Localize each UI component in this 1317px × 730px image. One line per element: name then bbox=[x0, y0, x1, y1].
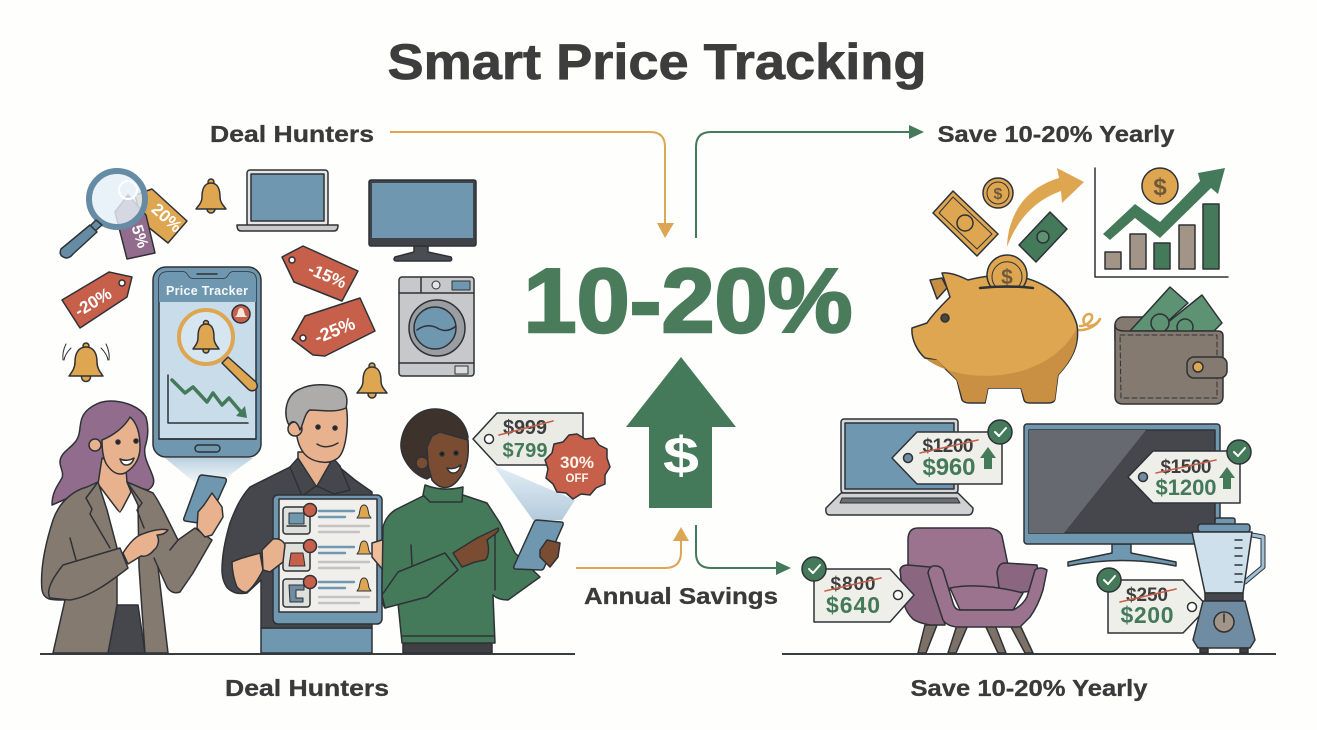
icon: blender bbox=[1192, 518, 1263, 653]
tag: minus 25 percent bbox=[292, 298, 375, 356]
woman face bbox=[102, 417, 140, 474]
chart: rising savings bbox=[1095, 168, 1228, 277]
icon: magnifier with price tags bbox=[60, 171, 187, 259]
woman hair bbox=[52, 401, 154, 505]
tag: minus 15 percent bbox=[282, 246, 358, 301]
holding hand bbox=[540, 540, 560, 567]
badge: 30 percent off: OFF bbox=[566, 473, 588, 485]
tag: blender price: $250 bbox=[1126, 585, 1168, 606]
man head bbox=[296, 405, 347, 462]
beam bbox=[493, 465, 575, 520]
tag: chair price: $640 bbox=[826, 592, 880, 618]
tablet rows bbox=[283, 504, 371, 607]
icon: coin bbox=[983, 178, 1013, 208]
icon: bell bbox=[196, 179, 226, 213]
phone bbox=[514, 520, 563, 570]
woman pointing hand bbox=[123, 529, 168, 564]
icon: bell right bbox=[357, 363, 387, 398]
tag: blender price: $200 bbox=[1120, 602, 1174, 628]
tag: minus 15 percent: -15% bbox=[305, 259, 349, 292]
tablet bbox=[273, 495, 382, 624]
tag: television price: $1500 bbox=[1160, 457, 1212, 478]
woman blazer right bbox=[127, 482, 212, 653]
woman blazer left bbox=[42, 482, 117, 653]
tag: television price bbox=[1128, 440, 1251, 503]
icon: magnifier with price tags: 20% bbox=[148, 199, 186, 236]
sweater sleeve bbox=[382, 553, 458, 608]
heading: deal hunters bottom: Deal Hunters bbox=[225, 675, 389, 701]
icon: green banknote bbox=[1019, 212, 1067, 262]
title: Smart Price Tracking bbox=[388, 34, 926, 90]
tag: 999 to 799: $999 bbox=[503, 417, 547, 439]
icon: price tracker phone bbox=[153, 267, 261, 457]
woman holding hand bbox=[197, 493, 223, 537]
icon: television bbox=[369, 180, 476, 261]
head hair bbox=[401, 409, 468, 479]
chart: rising savings: $ bbox=[1153, 174, 1167, 201]
tag: minus 25 percent: -25% bbox=[312, 313, 358, 348]
big percentage: 10-20% bbox=[524, 251, 852, 352]
chair front frame bbox=[928, 566, 1047, 627]
icon: laptop bbox=[237, 170, 338, 231]
panel: deal hunters illustration bbox=[42, 170, 610, 653]
heading: save yearly top: Save 10-20% Yearly bbox=[938, 121, 1175, 147]
icon: tan banknote bbox=[933, 191, 998, 256]
beam: phone projection bbox=[165, 458, 253, 483]
icon: piggy bank bbox=[912, 255, 1100, 403]
label: annual savings: Annual Savings bbox=[584, 583, 778, 609]
icon: coin: $ bbox=[994, 186, 1003, 203]
woman white shirt bbox=[105, 500, 139, 605]
icon: magnifier with price tags: 5% bbox=[128, 223, 151, 250]
person: man in green sweater bbox=[382, 409, 575, 653]
chair seat cushion bbox=[950, 586, 1023, 610]
woman skirt bbox=[108, 605, 145, 653]
phone magnifier bbox=[179, 310, 257, 391]
man neck and collar bbox=[298, 452, 333, 487]
right ground line bbox=[782, 653, 1276, 655]
phone header text: Price Tracker bbox=[166, 284, 248, 298]
arrow: deal hunters to centre bbox=[390, 132, 674, 238]
icon: up arrow with dollar bbox=[626, 357, 736, 508]
tag: minus 20 percent bbox=[62, 272, 132, 328]
heading: deal hunters top: Deal Hunters bbox=[210, 121, 374, 147]
tag: chair price: $800 bbox=[830, 574, 876, 595]
woman neck bbox=[98, 458, 131, 513]
arrow: left group to annual savings bbox=[576, 527, 689, 568]
arrow: annual savings to products bbox=[696, 525, 791, 575]
icon: armchair bbox=[900, 528, 1047, 653]
tag: blender price bbox=[1097, 568, 1208, 633]
woman sleeve bbox=[49, 548, 128, 600]
person: man with tablet bbox=[222, 385, 390, 653]
man forearm and hands bbox=[232, 553, 263, 592]
tag: 999 to 799: $799 bbox=[502, 440, 548, 462]
panel: savings illustration bbox=[802, 168, 1263, 653]
tag: television price: $1200 bbox=[1156, 475, 1216, 500]
coin dropping into slot bbox=[987, 255, 1027, 287]
person: woman with phone bbox=[42, 401, 226, 653]
tag: laptop price: $1200 bbox=[922, 436, 974, 457]
tag: laptop price: $960 bbox=[922, 454, 976, 481]
woman phone bbox=[184, 475, 226, 524]
heading: save yearly bottom: Save 10-20% Yearly bbox=[910, 675, 1148, 701]
icon: discounted laptop bbox=[826, 419, 973, 515]
icon: piggy bank: $ bbox=[1001, 266, 1013, 289]
left ground line bbox=[40, 653, 575, 655]
icon: curved growth arrow bbox=[1007, 168, 1084, 247]
phone alert badge bbox=[232, 305, 250, 323]
icon: television large bbox=[1024, 424, 1220, 566]
tag: laptop price bbox=[892, 420, 1012, 484]
icon: washing machine bbox=[399, 277, 474, 376]
pointing hand bbox=[453, 528, 499, 567]
icon: up arrow with dollar: $ bbox=[663, 427, 699, 485]
badge: 30 percent off bbox=[545, 434, 610, 499]
icon: ringing bell bbox=[63, 343, 109, 382]
sweater bbox=[382, 495, 540, 643]
phone falling price chart bbox=[168, 375, 248, 423]
piggy belly shade bbox=[926, 330, 1077, 402]
tag: chair price bbox=[802, 557, 914, 622]
head face bbox=[427, 432, 468, 488]
arrow: centre to save yearly bbox=[696, 125, 924, 238]
trousers bbox=[403, 643, 492, 653]
tag: minus 20 percent: -20% bbox=[71, 284, 115, 321]
tag: 999 to 799 bbox=[473, 413, 583, 465]
badge: 30 percent off: 30% bbox=[560, 453, 594, 472]
icon: wallet with cash bbox=[1115, 287, 1227, 404]
